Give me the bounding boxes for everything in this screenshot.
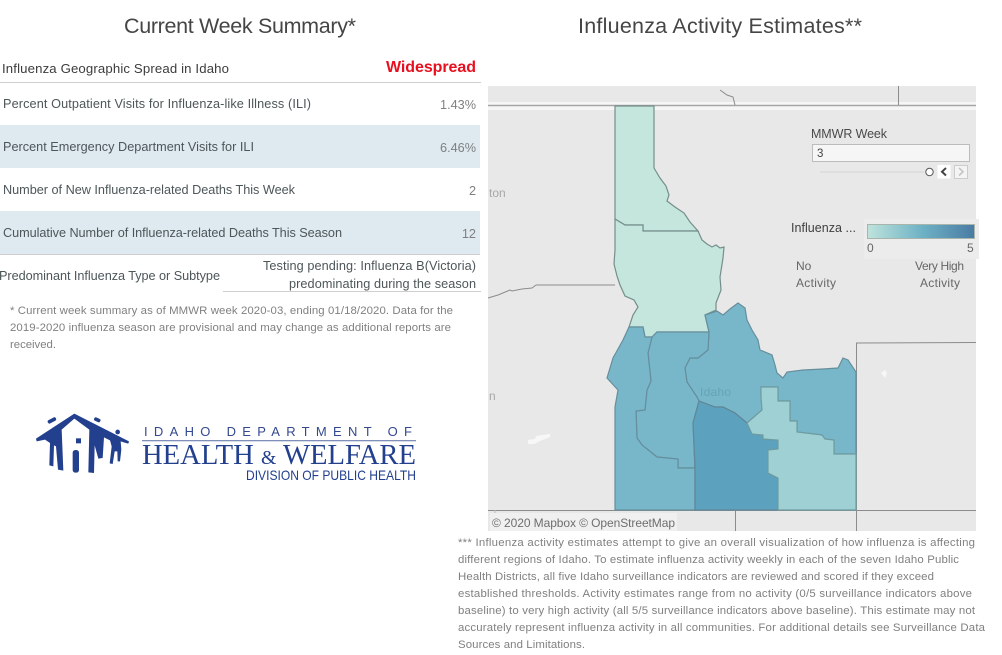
row: geographic spread: Influenza Geographic Spread in Idaho xyxy=(2,61,229,76)
district: southwest central xyxy=(636,332,709,468)
legend label: no activity: Activity xyxy=(796,276,836,290)
district: northern panhandle xyxy=(615,106,698,231)
row: emergency department visits: Percent Emergency Department Visits for ILI xyxy=(3,140,254,154)
district: southwest xyxy=(607,327,695,510)
legend label: very high activity xyxy=(915,259,964,290)
row: new deaths: 2 xyxy=(469,184,476,198)
row: cumulative deaths: 12 xyxy=(462,227,476,241)
row: new deaths: Number of New Influenza-related Deaths This Week xyxy=(3,183,296,197)
legend label: no activity xyxy=(796,259,836,290)
row: predominant type: Testing pending: Influenza B(Victoria) xyxy=(263,259,476,273)
map label: Washington fragment: ton xyxy=(489,186,506,200)
logo text: HEALTH & WELFARE xyxy=(142,439,416,471)
legend label: no activity: No xyxy=(796,259,812,273)
row: predominant type: predominating during the season xyxy=(289,277,476,291)
heading: current week summary: Current Week Summary* xyxy=(124,14,357,38)
legend: influenza activity color scale: Influenza ... xyxy=(791,221,856,235)
district: north central xyxy=(614,219,724,337)
map attribution: © 2020 Mapbox © OpenStreetMap xyxy=(492,516,675,530)
row: outpatient visits xyxy=(3,97,476,112)
row: cumulative deaths xyxy=(3,226,476,241)
map label: Oregon fragment: n xyxy=(489,389,496,403)
text block: summary footnote: * Current week summary as of MMWR week 2020-03, ending 01/18/2020. Data for the xyxy=(10,305,453,317)
panel: summary table xyxy=(0,59,481,292)
map base lines xyxy=(488,86,976,531)
logo text: IDAHO DEPARTMENT OF xyxy=(144,424,412,439)
text block: summary footnote: 2019-2020 influenza season are provisional and may change as additional reports are xyxy=(10,322,451,334)
row: outpatient visits: Percent Outpatient Visits for Influenza-like Illness (ILI) xyxy=(3,97,311,111)
row: predominant type xyxy=(0,259,476,291)
legend label: very high activity: Activity xyxy=(920,276,960,290)
row: emergency department visits xyxy=(3,140,476,155)
row: emergency department visits: 6.46% xyxy=(440,141,476,155)
text block: activity estimate footnote: baseline) to very high activity (all 5/5 surveillance indicators above baseline). This estimate may not xyxy=(458,605,976,617)
row: cumulative deaths: Cumulative Number of Influenza-related Deaths This Season xyxy=(3,226,342,240)
legend: influenza activity color scale: 0 xyxy=(867,241,874,255)
text block: activity estimate footnote: accurately represent influenza activity in all communities. For additional details see Surveillance Data xyxy=(458,622,986,634)
control: MMWR week selector: MMWR Week xyxy=(811,127,888,141)
legend label: very high activity: Very High xyxy=(915,259,964,273)
text block: summary footnote: received. xyxy=(10,339,56,351)
text block: activity estimate footnote: established thresholds. Activity estimates range from no activity (0/5 surveillance indicators above xyxy=(458,588,972,600)
legend: influenza activity color scale: 5 xyxy=(967,241,974,255)
row: geographic spread xyxy=(2,59,476,76)
row: geographic spread: Widespread xyxy=(386,59,476,76)
text block: activity estimate footnote: *** Influenza activity estimates attempt to give an overall visualization of how influenza is affecting xyxy=(458,537,975,549)
control: MMWR week selector: 3 xyxy=(817,148,823,160)
map label: Idaho: Idaho xyxy=(700,385,731,399)
row: new deaths xyxy=(3,183,476,198)
row: outpatient visits: 1.43% xyxy=(440,98,476,112)
text block: activity estimate footnote xyxy=(458,537,986,651)
legend: influenza activity color scale xyxy=(791,219,979,290)
text block: summary footnote xyxy=(10,305,453,351)
panel: map of Idaho xyxy=(488,86,976,531)
logo text xyxy=(142,424,416,483)
logo text: DIVISION OF PUBLIC HEALTH xyxy=(246,467,416,483)
row: predominant type: Predominant Influenza Type or Subtype xyxy=(0,269,220,283)
district: south central xyxy=(693,401,778,510)
district: southeast xyxy=(747,387,856,510)
text block: activity estimate footnote: different regions of Idaho. To estimate influenza activity weekly in each of the seven Idaho Public xyxy=(458,554,959,566)
heading: influenza activity estimates: Influenza Activity Estimates** xyxy=(578,14,863,38)
control: MMWR week selector xyxy=(811,127,970,178)
district: central xyxy=(685,303,856,454)
icon: house and family xyxy=(36,414,129,473)
text block: activity estimate footnote: Sources and Limitations. xyxy=(458,639,585,651)
logo: Idaho Department of Health and Welfare xyxy=(36,414,416,483)
text block: activity estimate footnote: Health Districts, all five Idaho surveillance indicators are reviewed and scored if they exceed xyxy=(458,571,934,583)
